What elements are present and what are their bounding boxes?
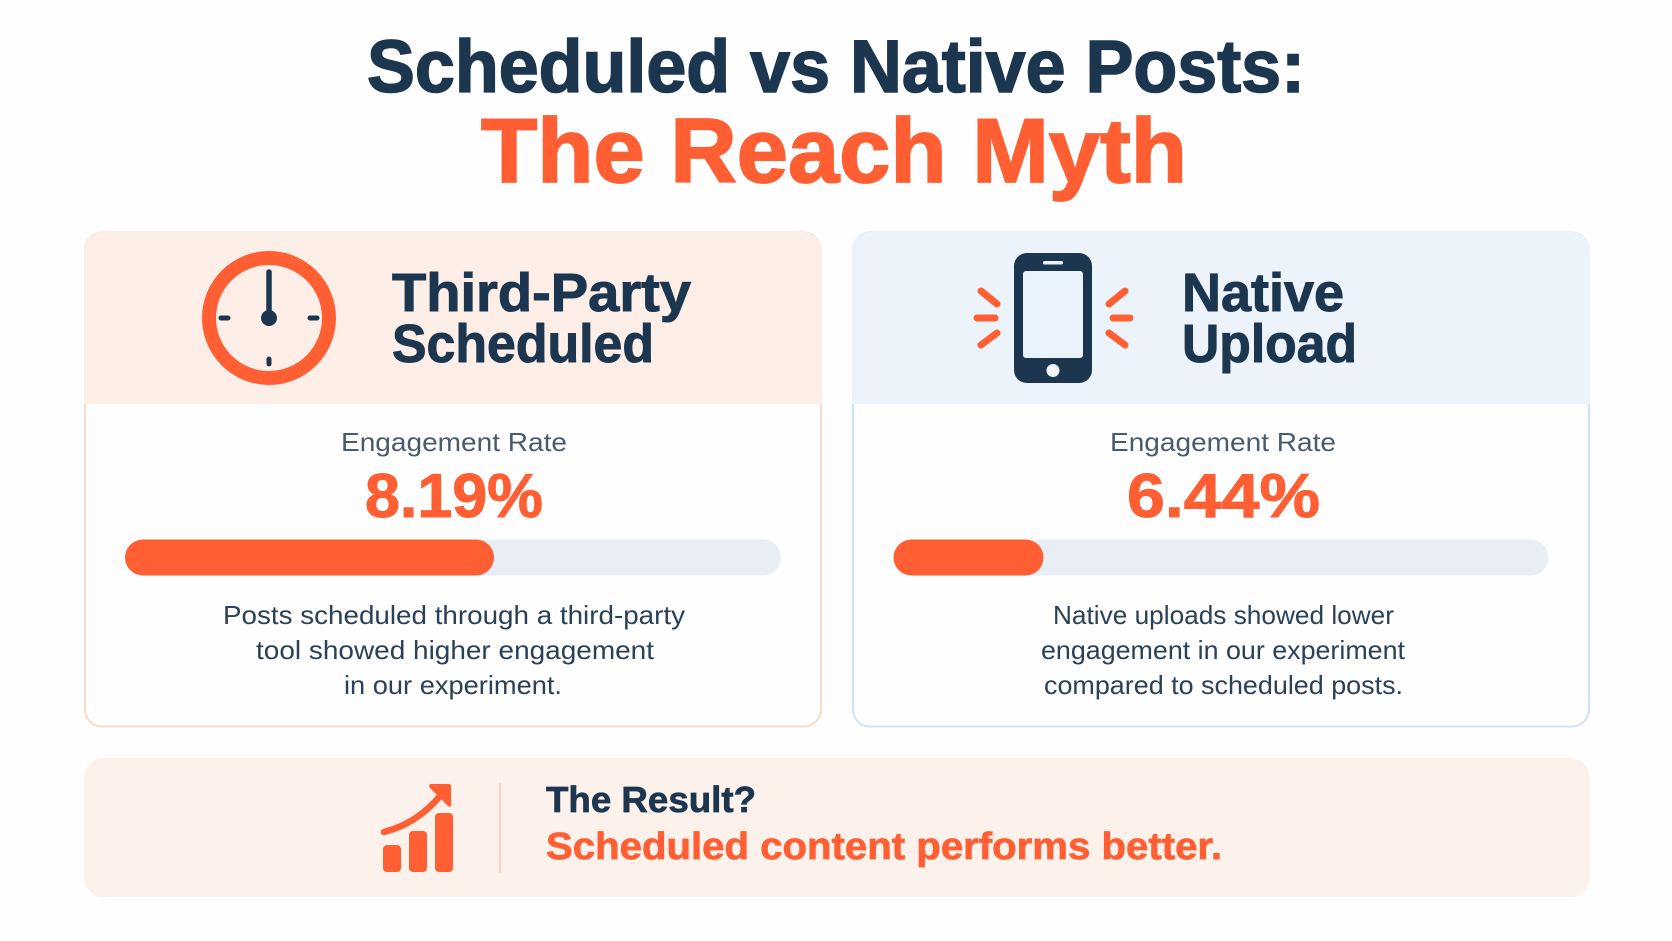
heading: third-party scheduled	[392, 263, 691, 374]
description: third-party: in our experiment.	[344, 670, 562, 700]
icon: phone	[977, 253, 1130, 383]
description: native: engagement in our experiment	[1041, 635, 1406, 665]
heading: third-party scheduled: Scheduled	[392, 314, 654, 374]
description: native	[1041, 600, 1406, 700]
panel header: native	[852, 232, 1590, 404]
divider	[499, 783, 501, 873]
icon: growth chart	[383, 784, 453, 872]
description: third-party: Posts scheduled through a third-party	[223, 600, 685, 630]
panel header: third-party	[84, 232, 822, 404]
title: Scheduled vs Native Posts:	[367, 25, 1305, 108]
description: native: compared to scheduled posts.	[1044, 670, 1403, 700]
panel: native upload	[852, 232, 1590, 726]
icon: clock	[209, 258, 329, 378]
description: native: Native uploads showed lower	[1053, 600, 1394, 630]
label: engagement rate: Engagement Rate	[1110, 427, 1336, 457]
result text	[546, 779, 1222, 868]
panel: result banner	[84, 758, 1590, 897]
progress bar: 6.44%	[894, 540, 1548, 576]
progress bar: 8.19%	[125, 540, 781, 576]
panel: third-party scheduled	[84, 232, 822, 726]
heading: native upload: Native	[1182, 263, 1344, 323]
result text: Scheduled content performs better.	[546, 826, 1222, 868]
label: engagement rate: Engagement Rate	[341, 427, 567, 457]
description: third-party: tool showed higher engagement	[256, 635, 655, 665]
title	[367, 25, 1305, 202]
value: 8.19%: 8.19%	[365, 462, 543, 531]
title: The Reach Myth	[481, 101, 1187, 202]
heading: third-party scheduled: Third-Party	[392, 263, 691, 323]
result text: The Result?	[546, 779, 756, 820]
heading: native upload: Upload	[1182, 314, 1357, 374]
heading: native upload	[1182, 263, 1357, 374]
value: 6.44%: 6.44%	[1127, 462, 1320, 531]
description: third-party	[223, 600, 685, 700]
